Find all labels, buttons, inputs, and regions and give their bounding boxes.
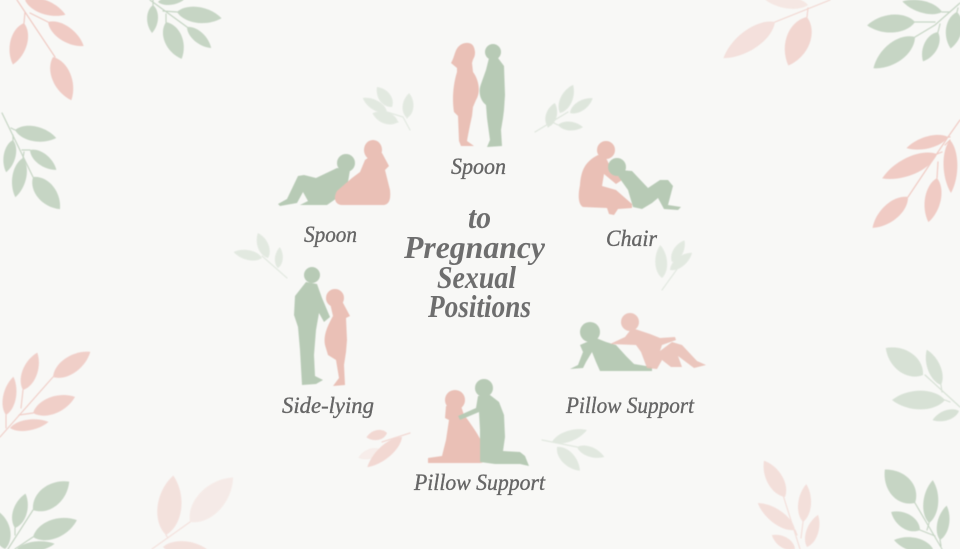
- branch: bottom-left pink: [0, 345, 95, 437]
- branch: bottom-right green: [876, 462, 953, 549]
- branch: top-right green: [866, 0, 960, 76]
- title: Sexual: [437, 259, 516, 295]
- silhouette: standing couple top: [451, 43, 505, 147]
- branch: top-right pink: [718, 0, 830, 70]
- branch: left green: [0, 113, 67, 215]
- pink figure: [610, 313, 706, 369]
- sprig: bottom left pink: [357, 428, 410, 472]
- pink figure: [579, 141, 632, 215]
- branch: bottom-left green: [0, 473, 80, 549]
- silhouette: reclining couple right: [570, 313, 706, 371]
- silhouette: seated couple right: [579, 141, 681, 215]
- silhouette: reclining couple left: [278, 140, 390, 206]
- man: [458, 379, 529, 466]
- title: Pregnancy: [403, 229, 546, 265]
- branch: right green faded: [879, 339, 960, 425]
- label: Side-lying: Side-lying: [282, 393, 374, 418]
- pink figure: [335, 140, 390, 205]
- label: Pillow Support right: Pillow Support: [565, 393, 695, 418]
- silhouette: kneeling couple bottom: [428, 379, 529, 466]
- green figure: [278, 154, 355, 206]
- sprig: upper right: [535, 82, 595, 132]
- woman: [451, 43, 479, 146]
- green figure: [608, 158, 681, 210]
- man: [294, 267, 330, 385]
- branch: bottom-right pink faded: [754, 457, 824, 549]
- woman: [325, 289, 350, 386]
- branch: top-left pink: [5, 0, 88, 104]
- label: Chair: Chair: [606, 226, 658, 251]
- branch: top-left green: [147, 0, 223, 62]
- silhouette: standing couple left: [294, 267, 350, 386]
- green figure: [570, 322, 652, 371]
- branch: bottom pink faded: [152, 468, 242, 549]
- man: [480, 44, 505, 147]
- title: [403, 199, 546, 324]
- woman: [428, 390, 486, 463]
- sprig: bottom right: [542, 425, 606, 475]
- label: Spoon left: Spoon: [304, 222, 357, 247]
- sprig: right: [654, 238, 695, 290]
- label: Pillow Support bottom: Pillow Support: [413, 470, 546, 495]
- sprig: upper left: [360, 83, 415, 130]
- label: Spoon top: Spoon: [451, 154, 506, 179]
- title: to: [468, 199, 491, 235]
- sprig: left: [233, 231, 287, 278]
- branch: right pink: [867, 120, 960, 234]
- title: Positions: [427, 288, 531, 324]
